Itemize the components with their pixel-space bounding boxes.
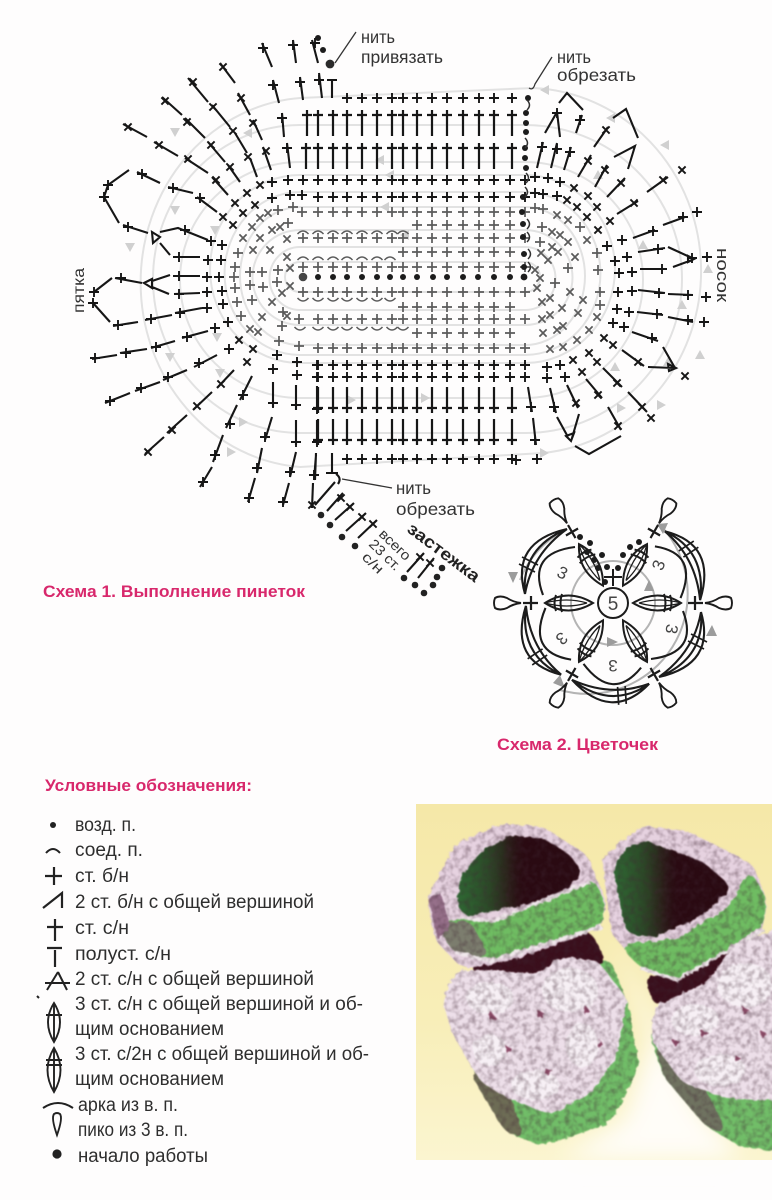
- flower arrows: [508, 523, 717, 688]
- callout: cut thread, top: нить: [557, 47, 591, 67]
- photo: crocheted booties: [416, 804, 772, 1160]
- legend text: соед. п.: [75, 840, 143, 861]
- flower chain dots: [577, 534, 642, 585]
- legend text: полуст. с/н: [75, 944, 171, 965]
- slip stitch arcs: [303, 231, 403, 233]
- legend icon: start of work: [52, 1149, 62, 1159]
- legend icon: single crochet: [45, 867, 62, 885]
- legend text: начало работы: [78, 1146, 208, 1167]
- legend text: щим основанием: [75, 1019, 224, 1040]
- chart: scheme 1 bootie sole: [92, 38, 713, 596]
- double crochet rows: [318, 123, 512, 156]
- heading: legend: Условные обозначения:: [45, 776, 252, 795]
- legend text: возд. п.: [75, 815, 136, 836]
- heading: scheme 2: Схема 2. Цветочек: [497, 735, 659, 754]
- legend icon: chain: [50, 822, 56, 828]
- label: clasp: застежка: [404, 519, 484, 586]
- flower petals and picots: [494, 495, 732, 721]
- legend text: 3 ст. с/н с общей вершиной и об-: [75, 994, 363, 1015]
- legend icon: three double crochet: [46, 1003, 62, 1042]
- flower numbers: [552, 557, 682, 675]
- flower numbers: 3: [552, 628, 571, 649]
- clasp chain dots: [318, 512, 445, 596]
- callout: tie on thread: [335, 27, 443, 67]
- legend text: 2 ст. с/н с общей вершиной: [75, 969, 314, 990]
- flower numbers: 3: [554, 562, 571, 584]
- legend icon: slip stitch: [46, 849, 60, 853]
- pale shadow between booties: [560, 935, 735, 1160]
- callout: cut thread, bottom: [342, 478, 475, 519]
- legend text: арка из в. п.: [78, 1095, 178, 1116]
- callout: cut thread, bottom: обрезать: [396, 499, 475, 519]
- flower numbers: 3: [661, 623, 682, 635]
- flower centre ring: [598, 588, 628, 618]
- legend text: ст. б/н: [75, 866, 129, 887]
- flower numbers: 5: [608, 594, 618, 615]
- legend text: [75, 815, 369, 1167]
- label: toe: носок: [713, 248, 732, 303]
- callout: tie on thread: нить: [361, 27, 395, 47]
- column of chain dots and arcs: [522, 98, 528, 267]
- right bootie: [603, 826, 772, 1150]
- legend icon: double crochet: [47, 919, 63, 941]
- legend icon: chain arc: [43, 1103, 73, 1108]
- legend icon: three treble crochet: [46, 1048, 62, 1092]
- legend text: щим основанием: [75, 1069, 224, 1090]
- flower guide lines: [520, 527, 688, 694]
- label: stitch count: 23 ст.: [366, 536, 404, 574]
- callout: cut thread, top: [529, 47, 636, 89]
- flower numbers: 3: [648, 557, 669, 573]
- label: stitch count: [359, 526, 415, 577]
- legend text: пико из 3 в. п.: [78, 1120, 188, 1141]
- legend text: 3 ст. с/2н с общей вершиной и об-: [75, 1044, 369, 1065]
- label: stitch count: всего: [376, 526, 415, 564]
- legend icon: half double: [47, 948, 62, 967]
- legend text: ст. с/н: [75, 918, 129, 939]
- label: stitch count: с/н: [359, 549, 387, 577]
- legend icon: two single crochet: [43, 893, 62, 908]
- legend text: 2 ст. б/н с общей вершиной: [75, 892, 314, 913]
- callout: cut thread, bottom: нить: [396, 478, 431, 498]
- callout: cut thread, top: обрезать: [557, 65, 636, 85]
- direction arrows: [125, 85, 713, 458]
- flower numbers: 3: [608, 656, 618, 675]
- label: heel: пятка: [71, 268, 88, 313]
- callout: tie on thread: привязать: [361, 47, 443, 67]
- legend icon: picot: [53, 1113, 61, 1135]
- legend: [37, 815, 369, 1167]
- left bootie: [428, 824, 638, 1145]
- start of work dots: [318, 38, 323, 50]
- stitch rows: centre: [299, 98, 530, 459]
- legend icon: two double crochet: [37, 972, 70, 998]
- guide rings: [141, 88, 701, 467]
- black single crochet rows: [318, 98, 525, 459]
- chart: scheme 2 flower: [494, 495, 732, 721]
- radial stitches: [92, 38, 707, 596]
- starting chain dots: [318, 276, 510, 278]
- grey single crochet rows: [318, 212, 525, 348]
- heading: scheme 1: Схема 1. Выполнение пинеток: [43, 582, 306, 601]
